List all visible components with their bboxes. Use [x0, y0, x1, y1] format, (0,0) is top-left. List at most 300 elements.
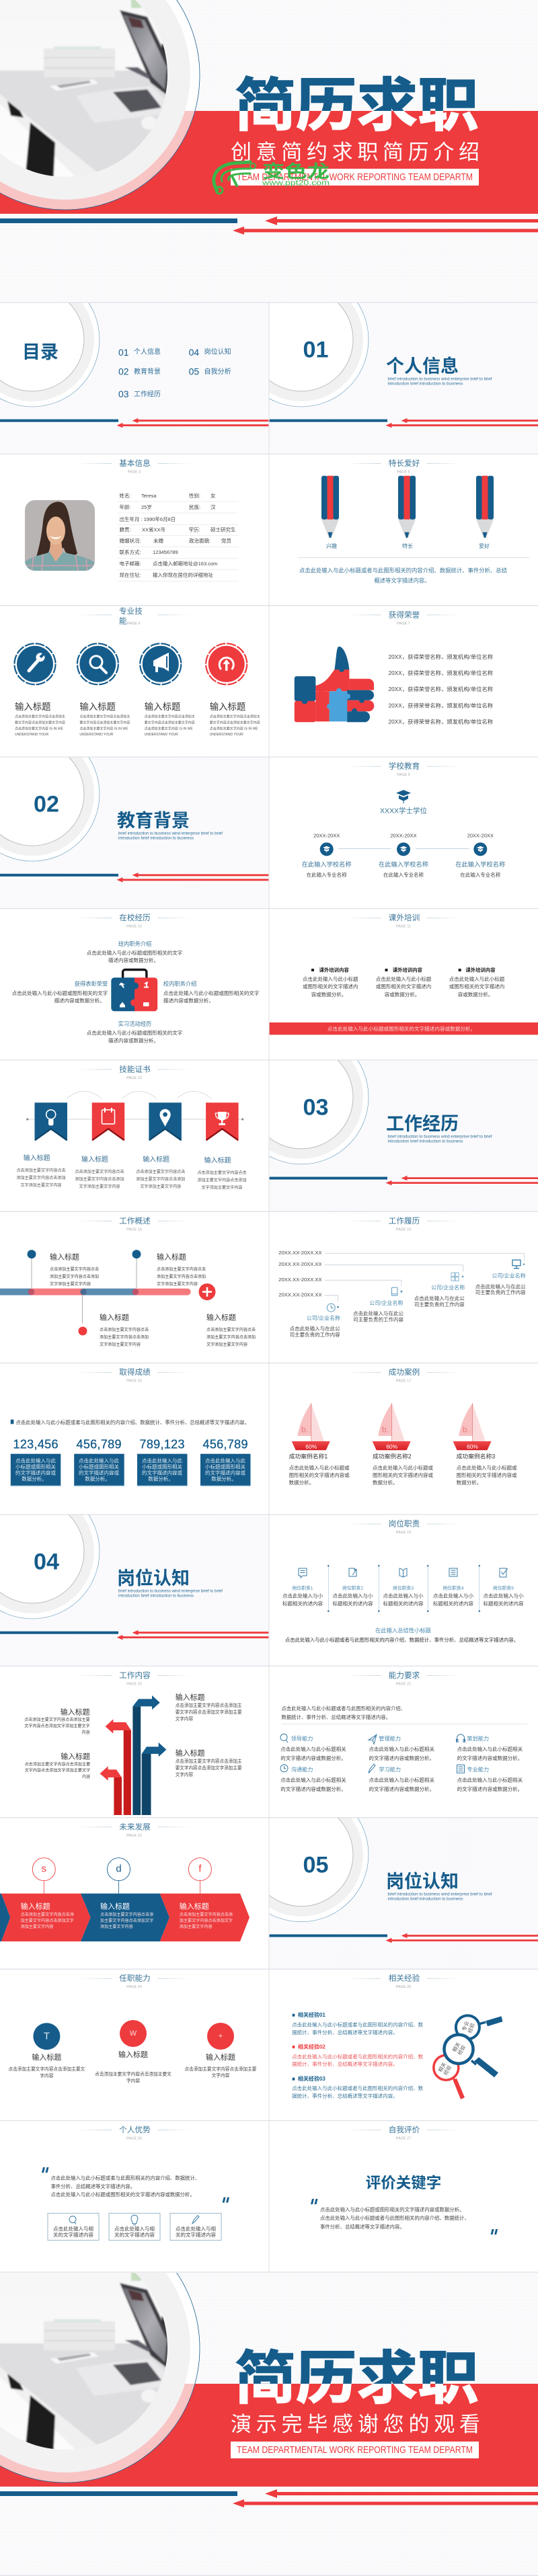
header: PAGE 7 [397, 622, 410, 626]
date labels: 20XX.XX-20XX.XX [278, 1278, 322, 1283]
magnifier cluster: 专业 [461, 2019, 470, 2031]
info table: 党员 [221, 537, 231, 544]
overview text blocks: 点击添加主要文字内容点击 [206, 1327, 256, 1332]
panel: honors [295, 610, 493, 725]
certificate text columns: 点击添加主要文字内容点击 [136, 1169, 185, 1174]
experience 03: 相关经验03 [298, 2075, 325, 2082]
skill text columns: 点击添加主要文字内容 IS IN WE [145, 726, 193, 731]
education timeline: 20XX-20XX [467, 832, 494, 838]
duty columns: 岗位职责3 [393, 1585, 414, 1591]
header: 学校教育 [389, 762, 420, 771]
text: lower right: 输入标题 [176, 1748, 205, 1758]
skill text columns: 点击添加主要文字内容 IS IN WE [15, 726, 64, 731]
header: PAGE 5 [397, 470, 410, 474]
skill text columns: 点击添加主要文字内容点击添加主 [79, 714, 130, 719]
info table: 女 [210, 492, 216, 499]
stat 1: 小标题或图形相关 [15, 1463, 56, 1470]
duty columns: 岗位职责2 [342, 1585, 363, 1591]
list: contents: 自我分析 [204, 367, 231, 376]
header: PAGE 21 [396, 1682, 411, 1686]
duty columns: 标题相关的述内容 [383, 1600, 424, 1607]
degree: XXXX学士学位 [380, 807, 428, 815]
text: honors [12, 980, 108, 1004]
panel: competency [9, 1974, 257, 2084]
list: contents: 个人信息 [134, 347, 161, 356]
stat 3: 数据分析。 [148, 1475, 174, 1482]
section caption: brief introduction to business wind enterprise brief to brief [118, 1589, 223, 1593]
case 3: 点击此处输入与此小标题或 [457, 1464, 517, 1471]
section caption: introduction brief introduction to business [387, 1139, 463, 1143]
ability items [280, 1735, 523, 1792]
strength box 3: 关的文字描述内容 [176, 2231, 216, 2238]
text: internship: 描述内容或数据分析。 [108, 1037, 159, 1043]
overview text blocks: 输入标题 [50, 1252, 79, 1261]
info table: 民族: [189, 504, 200, 510]
text: upper right: 输入标题 [176, 1693, 205, 1702]
magnifier cluster: 经验 [456, 2044, 467, 2056]
text: lower right: 点击添加主要文字内容点击添加主 [176, 1758, 242, 1764]
list: contents: 01 [118, 347, 129, 358]
info table: Teresa [141, 493, 157, 499]
header [346, 1974, 461, 1989]
date labels: 20XX.XX-20XX.XX [278, 1251, 322, 1256]
case 1: 数据分析。 [289, 1479, 314, 1486]
closing subtitle: 演示完毕感谢您的观看 [231, 2413, 480, 2436]
pencil labels [326, 542, 490, 549]
ribbon: pin [149, 1102, 182, 1141]
chevron text [21, 1902, 233, 1929]
panel: cover slide [0, 0, 538, 303]
case 1 [289, 1403, 350, 1486]
evaluation text: 点击此处输入与此小标题或者与此图形相关的内容介绍、数据统计、 [320, 2215, 469, 2221]
header: 专业技 [119, 606, 143, 616]
portrait photo [25, 500, 95, 571]
chevron text: 输入标题 [180, 1902, 209, 1911]
company blocks [290, 1272, 526, 1338]
overview text blocks: 文字添加主要文字内容 [50, 1281, 91, 1287]
header: 基本信息 [119, 458, 151, 468]
stat 3: 点击此处输入与此 [142, 1457, 182, 1463]
date labels: 20XX.XX-20XX.XX [278, 1262, 322, 1267]
competency W: 输入标题 [118, 2050, 148, 2059]
panel: work overview [0, 1217, 256, 1347]
case 2: b. [382, 1425, 389, 1435]
skill text columns: UNDERSTAND YOUR [145, 733, 178, 737]
header: 个人优势 [119, 2126, 151, 2134]
intro text: 数据统计、事件分析、总结概述等文字描述内容。 [281, 1714, 391, 1720]
header: PAGE 12 [126, 1076, 142, 1080]
list: contents: 岗位认知 [204, 347, 231, 356]
section title: 岗位认知 [386, 1871, 459, 1892]
text: lower right: 要文字内容点击添加文字添加主要 [176, 1765, 242, 1771]
certificate text columns: 文字添加主要文字内容 [79, 1184, 120, 1189]
competency plus: 点击添加主要文字内容点击添加主要 [184, 2066, 257, 2072]
honors list [389, 653, 493, 725]
header [346, 913, 461, 929]
certificate text columns: 输入标题 [81, 1155, 108, 1164]
summary: 点击此处输入与此小标题或者与此图形相关的内容介绍、数据统计、事件分析、总结概述等文字描述内容。 [285, 1637, 518, 1643]
training column 2: 容或数据分析。 [385, 991, 420, 998]
stat 4: 的文字描述内容或 [205, 1469, 245, 1476]
ribbon: trophy [206, 1102, 239, 1141]
company blocks: 司主要负责的工作内容 [353, 1316, 404, 1323]
company blocks: 公司/企业名称 [369, 1299, 404, 1306]
panel: certificates [16, 1064, 247, 1190]
text: internship: 点击此处输入与此小标题或图形相关的文字 [87, 1029, 182, 1036]
panel: education [302, 762, 505, 878]
overview text blocks: 点击添加主要文字内容点击 [157, 1266, 206, 1272]
overview text blocks: 添加主要文字内容点击添加 [157, 1274, 206, 1279]
stat 4: 小标题或图形相关 [205, 1463, 245, 1470]
competency T: 字内容 [40, 2072, 54, 2079]
ability items: 点击此处输入与此小标题相关 [457, 1745, 523, 1752]
summary [285, 1627, 518, 1643]
panel: closing slide [0, 2273, 538, 2575]
skill text columns: 输入标题 [210, 702, 245, 712]
certificate text columns: 文字添加主要文字内容 [202, 1185, 242, 1191]
text: upper right: 文字内容 [176, 1716, 193, 1722]
ability items: 的文字描述内容或数据分析。 [280, 1785, 346, 1792]
ability items: 领导能力 [291, 1735, 313, 1742]
circle: d: d [116, 1863, 122, 1874]
strength box 1: 点击此处输入与相 [53, 2225, 93, 2232]
header: PAGE 11 [396, 925, 411, 929]
english tag box [231, 2442, 479, 2458]
quote text: 事件分析、总结概述等文字描述内容。 [51, 2183, 135, 2189]
info table: 联系方式: [120, 549, 141, 555]
strength box 1 [48, 2213, 99, 2241]
certificate text columns [16, 1154, 247, 1190]
arrow: red tall [106, 1719, 131, 1815]
duty columns: 点击此处输入与小 [483, 1592, 524, 1599]
section caption: introduction brief introduction to business [387, 382, 463, 386]
certificate text columns: 添加主要文字内容点击添加 [197, 1178, 247, 1183]
chevron text: 加主要文字内容点击添加文字 [180, 1918, 233, 1923]
text: upper left: 内容 [82, 1730, 90, 1735]
history connectors [325, 1253, 525, 1302]
competency plus [184, 2023, 257, 2079]
header: 工作概述 [119, 1217, 151, 1225]
skill text columns: 点击添加主要文字内容 IS IN WE [210, 726, 258, 731]
header [77, 1671, 192, 1686]
section title: 教育背景 [117, 811, 190, 831]
section caption: introduction brief introduction to business [118, 836, 194, 841]
chevron text: 输入标题 [100, 1902, 130, 1911]
header: 获得荣誉 [389, 610, 420, 619]
ability items: 的文字描述内容或数据分析。 [369, 1785, 434, 1792]
section title: 个人信息 [386, 356, 459, 376]
english tag box: TEAM DEPARTMENTAL WORK REPORTING TEAM DEPARTM [237, 2444, 473, 2456]
honors list: 20XX，获得荣誉名称，颁发机构/单位名称 [389, 718, 493, 725]
case 2: 60% [386, 1443, 398, 1450]
honors list: 20XX，获得荣誉名称，颁发机构/单位名称 [389, 670, 493, 676]
panel: campus experience [12, 913, 259, 1043]
certificate text columns: 输入标题 [24, 1154, 50, 1162]
info table: 25岁 [141, 504, 152, 510]
duty columns: 标题相关的述内容 [282, 1600, 323, 1607]
icons: duty set [299, 1568, 508, 1578]
honors list: 20XX，获得荣誉名称，颁发机构/单位名称 [389, 702, 493, 709]
timeline bar [0, 1250, 191, 1335]
pencil labels: 特长 [402, 542, 413, 549]
stat 4: 456,789 [203, 1437, 247, 1451]
ribbon: bulb [35, 1102, 67, 1141]
company blocks: 公司/企业名称 [307, 1315, 340, 1322]
overview text blocks: 添加主要文字内容点击添加 [100, 1334, 149, 1340]
icon: phone [391, 1287, 402, 1295]
circle: s [32, 1858, 55, 1894]
experience 01: 点击此处输入与此小标题或者与此图形相关的内容介绍、数 [292, 2021, 424, 2027]
header: 未来发展 [119, 1822, 151, 1831]
ability items: 的文字描述内容或数据分析。 [369, 1755, 434, 1761]
header: 特长爱好 [389, 458, 420, 468]
duty columns: 标题相关的述内容 [433, 1600, 473, 1607]
strength box 2: 关的文字描述内容 [114, 2231, 155, 2238]
skill text columns: 点击添加主要文字内容点击添加主 [210, 714, 260, 719]
experience 01 [292, 2011, 424, 2036]
header: PAGE 14 [126, 1227, 142, 1232]
skill text columns: 要文字内容点击添加主要文字内容 [79, 720, 130, 725]
company blocks: 司主要负责的工作内容 [475, 1289, 526, 1295]
title: 简历求职 two-tone: 简历求职 [235, 74, 479, 138]
magnifier cluster [434, 2015, 503, 2099]
quote text: 点击此处输入与此小标题或者与此图形相关的内容介绍、数据统计、 [51, 2175, 200, 2181]
section number: 02 [34, 792, 59, 817]
ability items: 的文字描述内容或数据分析。 [457, 1785, 523, 1792]
stat 3: 小标题或图形相关 [142, 1463, 182, 1470]
overview text blocks: 文字添加主要文字内容 [206, 1342, 247, 1347]
pencil 2 [398, 476, 416, 538]
panel: achievements [11, 1368, 251, 1486]
title: 简历求职 two-tone: 简历求职 [235, 2346, 479, 2411]
education timeline: 在此输入专业名称 [383, 871, 424, 878]
company blocks: 点击此处输入与在此公 [353, 1310, 404, 1317]
case 3: 成功案例名称3 [457, 1453, 495, 1460]
header [77, 913, 192, 929]
case 2: 数据分析。 [373, 1479, 398, 1486]
section caption: introduction brief introduction to business [118, 1593, 194, 1599]
header [77, 1217, 192, 1232]
skill text columns: 点击添加主要文字内容点击添加主 [145, 714, 195, 719]
header: 工作内容 [119, 1671, 151, 1680]
ability items: 点击此处输入与此小标题相关 [280, 1745, 346, 1752]
training column 1: 容或数据分析。 [311, 991, 346, 998]
competency W: 字内容 [126, 2077, 140, 2083]
circle: f: f [198, 1863, 202, 1874]
skill text columns: 输入标题 [145, 702, 180, 712]
chevron text: 添加主要文字内容 [21, 1924, 53, 1929]
header: PAGE 22 [126, 1834, 142, 1838]
arrow: red short [100, 1766, 122, 1815]
info table: 输入你现在居住的详细地址 [153, 571, 213, 578]
header: PAGE 16 [126, 1379, 142, 1383]
section caption: brief introduction to business wind enterprise brief to brief [387, 1134, 492, 1139]
duty columns: 岗位职责1 [293, 1585, 313, 1591]
overview text blocks: 输入标题 [206, 1312, 236, 1322]
header: 任职能力 [119, 1974, 151, 1983]
case 3: 图形相关的文字描述内容或 [457, 1472, 517, 1478]
icon: grid [451, 1273, 463, 1281]
header: 在校经历 [119, 913, 151, 922]
duty columns: 点击此处输入与小 [433, 1592, 473, 1599]
icon: graduation cap [396, 790, 411, 803]
ability items: 点击此处输入与此小标题相关 [280, 1776, 346, 1783]
training column 1: 课外培训内容 [319, 967, 349, 973]
info table: 未婚 [153, 537, 163, 544]
panel: future development [0, 1822, 249, 1941]
stat 2 [74, 1437, 124, 1486]
magnifier cluster: 相关 [436, 2061, 447, 2073]
case 2: 图形相关的文字描述内容或 [373, 1472, 433, 1478]
duty columns: 标题相关的述内容 [332, 1600, 373, 1607]
certificate text columns: 添加主要文字内容点击添加 [136, 1176, 185, 1182]
competency plus: 输入标题 [206, 2052, 235, 2062]
case 1: 60% [305, 1443, 317, 1450]
ability items: 点击此处输入与此小标题相关 [369, 1745, 434, 1752]
overview text blocks: 文字添加主要文字内容 [100, 1342, 141, 1347]
dotted timeline [26, 1118, 243, 1121]
section caption: introduction brief introduction to business [387, 1896, 463, 1901]
summary: 在此输入总结性小标题 [375, 1627, 431, 1634]
text: upper left: 点击添加主要文字内容点击添加主要 [24, 1717, 90, 1722]
circle: d [108, 1858, 130, 1894]
watermark logo: www.ppt20.com [262, 179, 330, 187]
intro text: 点击此处输入与此小标题或者与此图形相关的内容介绍、 [281, 1705, 406, 1712]
strength box 2 [109, 2213, 160, 2241]
stat 4 [200, 1437, 250, 1486]
certificate text columns: 文字添加主要文字内容 [140, 1184, 181, 1189]
case 1: 点击此处输入与此小标题或 [289, 1464, 350, 1471]
info table: 123456789 [153, 549, 178, 555]
evaluation text: 点击此处输入与此小标题或图形相关的文字描述内容或数据分析。 [320, 2207, 464, 2213]
header: 岗位职责 [389, 1519, 420, 1529]
header [77, 458, 192, 474]
section title: 岗位认知 [117, 1568, 190, 1588]
stat 4: 数据分析。 [211, 1475, 237, 1482]
quote text: 点击此处输入与此小标题或图形相关的文字描述内容或数据分析。 [51, 2191, 195, 2198]
training column 1 [303, 967, 358, 998]
skill text columns: 输入标题 [15, 702, 51, 712]
competency W: 点击添加主要文字内容点击添加主要文 [95, 2070, 171, 2077]
panel: strengths [42, 2126, 229, 2241]
stat 2: 数据分析。 [85, 1475, 110, 1482]
icon: megaphone badge [140, 643, 181, 684]
description [297, 557, 529, 584]
text: lower left: 输入标题 [61, 1752, 90, 1761]
header [77, 1064, 192, 1080]
header: PAGE 4 [128, 470, 141, 474]
chevron text: 点击添加主要文字内容点击添 [21, 1912, 74, 1917]
overview text blocks: 文字添加主要文字内容 [157, 1281, 198, 1287]
company blocks: 公司/企业名称 [431, 1284, 465, 1291]
list: contents: 03 [118, 389, 129, 399]
panel: section 04 [0, 1484, 269, 1666]
panel: table of contents [0, 272, 269, 454]
stat 4: 点击此处输入与此 [205, 1457, 245, 1463]
skill text columns: UNDERSTAND YOUR [79, 733, 114, 737]
ability items: 的文字描述内容或数据分析。 [457, 1755, 523, 1761]
certificate text columns: 添加主要文字内容点击添加 [16, 1175, 66, 1180]
header: 相关经验 [389, 1974, 420, 1983]
text: campus role: 描述内容或数据分析。 [163, 997, 214, 1004]
education timeline: 在此输入学校名称 [379, 860, 428, 868]
header [346, 2126, 461, 2141]
section caption [118, 1589, 223, 1599]
panel: related experience [292, 1974, 503, 2099]
certificate text columns: 点击添加主要文字内容点击 [197, 1170, 247, 1176]
experience 01: 据统计、事件分析、总结概述等文字描述内容。 [292, 2029, 398, 2036]
english tag box: TEAM DEPARTMENTAL WORK REPORTING TEAM DEPARTM [237, 171, 473, 183]
ability items: 管理能力 [379, 1735, 401, 1742]
stat 1: 的文字描述内容或 [15, 1469, 56, 1476]
panel: responsibilities [282, 1519, 524, 1643]
experience 02: 据统计、事件分析、总结概述等文字描述内容。 [292, 2060, 398, 2067]
header: PAGE 19 [396, 1531, 411, 1535]
panel: section 02 [0, 727, 269, 908]
strength box 2: 点击此处输入与相 [114, 2225, 155, 2232]
section caption [118, 832, 223, 841]
info table: 硕士研究生 [210, 526, 236, 533]
section caption [387, 376, 492, 386]
header: 能 [119, 616, 127, 625]
text: class role: 描述内容或数据分析。 [108, 957, 159, 963]
stat 3 [137, 1437, 187, 1486]
section caption [387, 1134, 492, 1143]
education timeline [302, 832, 505, 878]
stat 2: 的文字描述内容或 [79, 1469, 119, 1476]
icon: wrench badge [15, 643, 55, 684]
header: 课外培训 [389, 913, 420, 922]
case 1: b. [301, 1425, 308, 1435]
header [346, 762, 461, 777]
circle: s: s [42, 1863, 46, 1874]
duty columns: 点击此处输入与小 [332, 1592, 373, 1599]
text: lower left [25, 1752, 90, 1779]
header: PAGE 25 [396, 1985, 411, 1989]
skill text columns: 要文字内容点击添加主要文字内容 [210, 720, 260, 725]
icon: clock [327, 1303, 339, 1312]
overview text blocks: 输入标题 [100, 1312, 129, 1322]
duty columns: 岗位职责4 [443, 1585, 464, 1591]
chevron text: 加主要文字内容点击添加文字 [21, 1918, 74, 1923]
honors list: 20XX，获得荣誉名称，颁发机构/单位名称 [389, 653, 493, 660]
certificate text columns: 添加主要文字内容点击添加 [75, 1176, 124, 1182]
stat 3: 的文字描述内容或 [142, 1469, 182, 1476]
section number: 03 [303, 1094, 328, 1120]
text: lower left: 文字内容点击添加文字添加主要文字 [25, 1767, 90, 1773]
company blocks: 公司/企业名称 [492, 1273, 526, 1279]
info table: 婚姻状况: [120, 537, 141, 544]
header: PAGE 15 [396, 1227, 411, 1232]
training column 2: 课外培训内容 [393, 967, 423, 973]
header [346, 1217, 461, 1232]
icon: monitor [512, 1260, 525, 1269]
experience 02: 点击此处输入与此小标题或者与此图形相关的内容介绍、数 [292, 2053, 424, 2060]
intro text [281, 1705, 527, 1724]
header [77, 2126, 192, 2141]
competency plus: 文字内容 [212, 2072, 230, 2078]
icon: puzzle thumbs-up [295, 647, 374, 722]
info table: 籍贯: [120, 526, 131, 533]
training column 3: 课外培训内容 [465, 967, 496, 973]
overview text blocks: 输入标题 [157, 1252, 186, 1261]
circle: f [188, 1858, 211, 1894]
info table: 出生年月 : 1990年6月8日 [120, 516, 176, 522]
text: campus role: 点击此处输入与此小标题或图形相关的文字 [163, 990, 259, 996]
education timeline: 在此输入学校名称 [455, 860, 505, 868]
text: lower right: 文字内容 [176, 1771, 193, 1777]
case 1: 成功案例名称1 [289, 1453, 328, 1460]
